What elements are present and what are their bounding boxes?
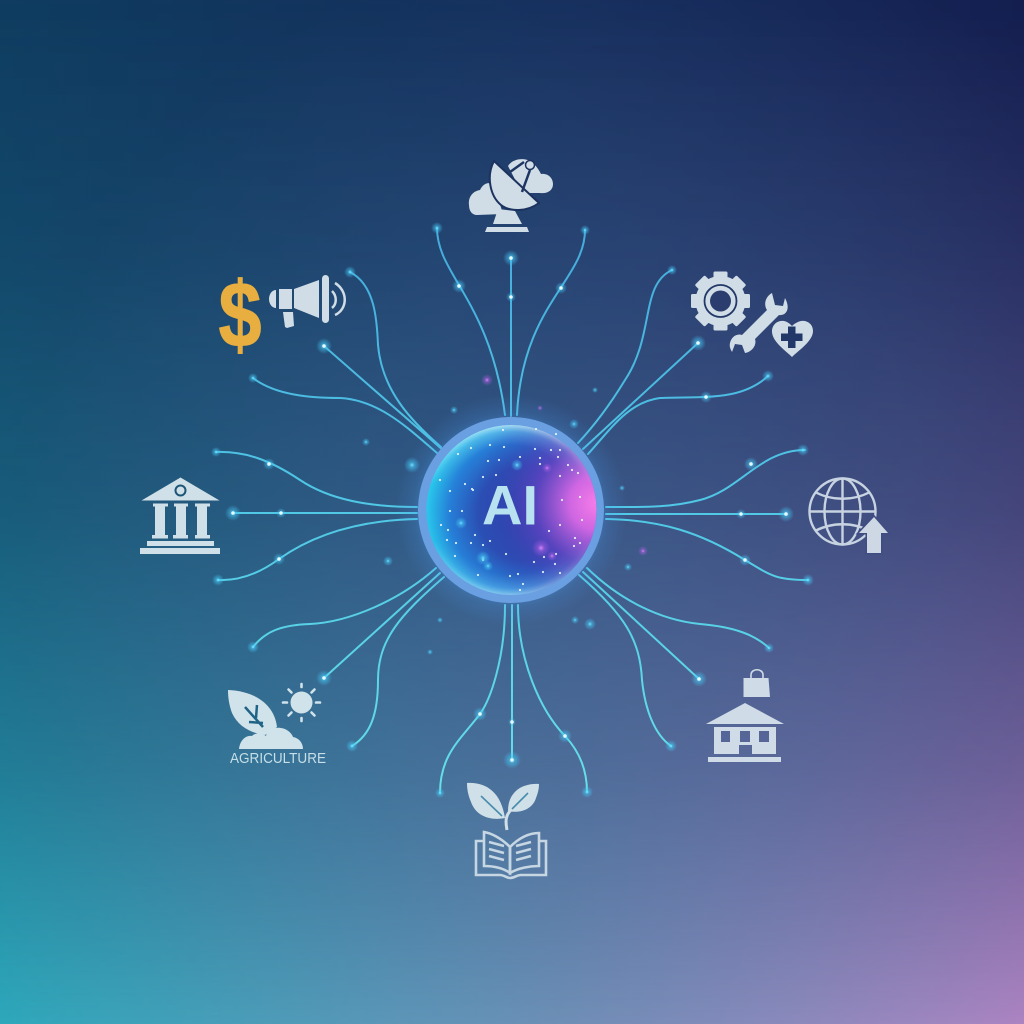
sphere rim light — [426, 425, 596, 595]
sphere outer halo — [395, 394, 627, 626]
sphere body — [426, 425, 596, 595]
icon: shop with shopping bag — [706, 670, 784, 762]
icon: megaphone — [269, 275, 345, 328]
shopping bag — [744, 670, 770, 697]
icon: dollar sign: $ — [218, 264, 262, 367]
network connections — [211, 222, 814, 798]
icon: seedling and open book — [467, 783, 546, 878]
icon: leaf, sun and cloud with label — [228, 684, 326, 767]
sphere soft sparkles — [455, 459, 557, 571]
connection lines — [216, 228, 808, 793]
icon: heart with cross — [772, 321, 813, 357]
AI label: AI — [482, 474, 538, 536]
icon: satellite dish with clouds — [469, 159, 553, 232]
floating particles — [362, 374, 648, 655]
icon: wrench — [730, 293, 788, 353]
icon: globe with up arrow — [810, 478, 888, 553]
glowing end and mid nodes — [211, 222, 814, 798]
icon: gear — [691, 272, 750, 330]
sphere ring — [418, 417, 604, 603]
icon: government building — [140, 478, 220, 554]
node cores — [233, 258, 786, 760]
sphere magenta side — [426, 425, 596, 595]
sphere stars — [440, 429, 582, 590]
agriculture label: AGRICULTURE — [230, 750, 326, 767]
AI sphere — [404, 402, 619, 617]
